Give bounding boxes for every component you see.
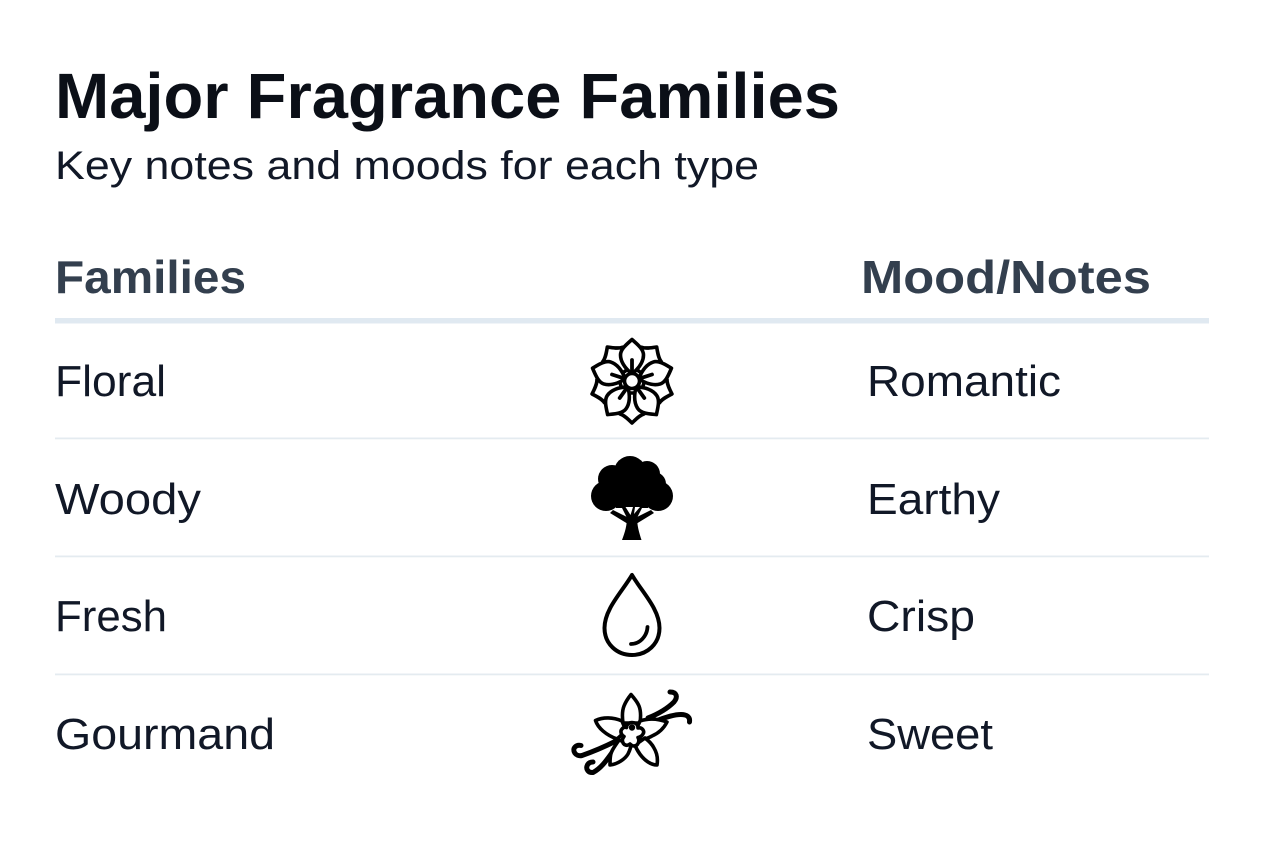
mood: crisp: Crisp [867, 592, 975, 641]
subtitle: Key notes and moods for each type [55, 144, 759, 188]
label: floral: Floral [55, 357, 166, 406]
column heading: mood/notes: Mood/Notes [861, 251, 1151, 303]
title: Major Fragrance Families [55, 60, 840, 132]
column heading: families: Families [55, 251, 246, 303]
label: fresh: Fresh [55, 592, 167, 641]
row: floral [55, 340, 1061, 423]
icon: flower [588, 340, 676, 423]
row: woody [55, 456, 1000, 540]
mood: romantic: Romantic [867, 357, 1061, 406]
icon: vanilla flower [574, 692, 690, 773]
row: gourmand [55, 692, 993, 773]
label: gourmand: Gourmand [55, 710, 275, 759]
icon: water drop [604, 575, 660, 655]
label: woody: Woody [55, 475, 201, 524]
row: fresh [55, 575, 975, 655]
mood: sweet: Sweet [867, 710, 993, 759]
icon: tree [591, 456, 673, 540]
mood: earthy: Earthy [867, 475, 1000, 524]
